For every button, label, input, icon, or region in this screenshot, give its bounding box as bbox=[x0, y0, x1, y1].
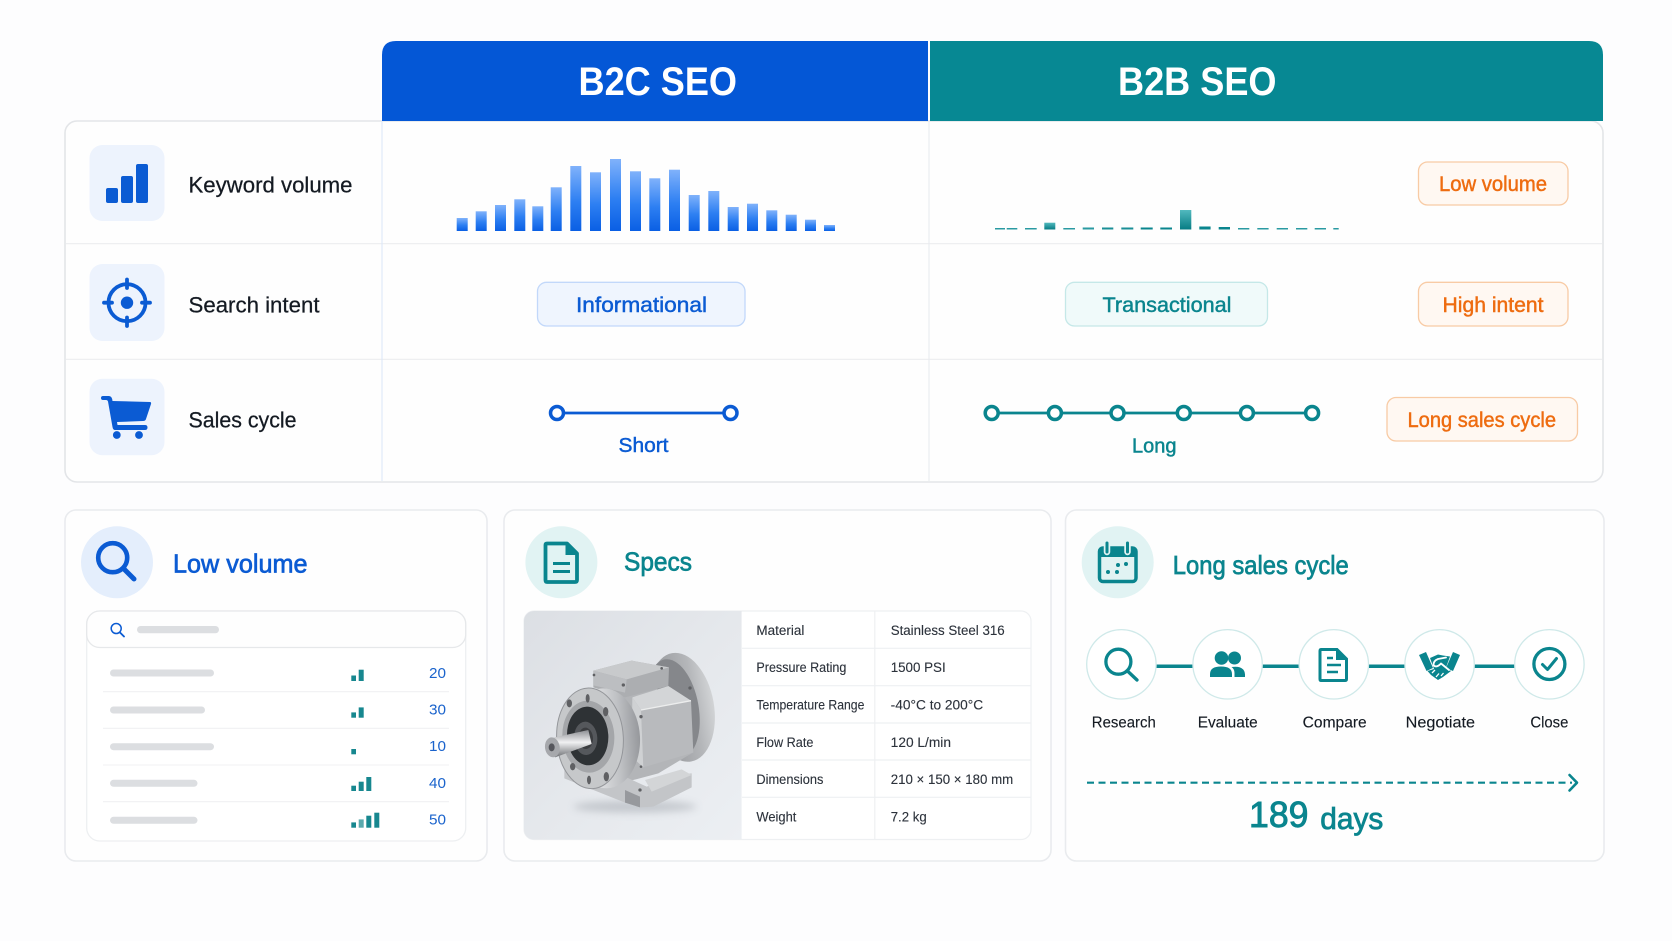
icon: document circle bbox=[525, 526, 597, 598]
metric: 189 days bbox=[1249, 794, 1383, 836]
heading: low volume: Low volume bbox=[173, 549, 308, 579]
pill: High intent bbox=[1418, 282, 1568, 326]
keyword list box: 10 bbox=[429, 738, 446, 755]
row: search intent label bbox=[90, 264, 320, 341]
arrow: dashed timeline bbox=[1087, 775, 1577, 790]
spec table bbox=[524, 611, 1031, 840]
process connector lines bbox=[1156, 665, 1515, 668]
spec table: 210 × 150 × 180 mm bbox=[891, 772, 1013, 787]
heading: long sales cycle: Long sales cycle bbox=[1173, 550, 1349, 580]
pill: Long sales cycle bbox=[1387, 398, 1578, 441]
header: B2C SEO bbox=[382, 41, 928, 121]
pill: Informational: Informational bbox=[576, 294, 707, 317]
keyword list box bbox=[87, 611, 466, 841]
step: compare: Compare bbox=[1303, 714, 1367, 731]
timeline: long: Long bbox=[1132, 436, 1176, 458]
step: evaluate: Evaluate bbox=[1198, 714, 1258, 731]
metric: 189 days: 189 bbox=[1249, 794, 1308, 835]
product photo: gear motor bbox=[524, 611, 742, 840]
timeline: short bbox=[550, 406, 737, 457]
pill: Transactional bbox=[1066, 282, 1268, 326]
keyword list box: 20 bbox=[429, 665, 446, 682]
row: sales cycle label: Sales cycle bbox=[188, 407, 296, 432]
step: research bbox=[1087, 630, 1156, 731]
panel: low volume bbox=[65, 510, 487, 861]
heading: specs: Specs bbox=[624, 547, 692, 577]
spec table: Flow Rate bbox=[756, 735, 813, 750]
panel: long sales cycle bbox=[1066, 510, 1604, 861]
icon: calendar circle bbox=[1082, 526, 1154, 598]
icon: target bbox=[90, 264, 164, 341]
comparison table body bbox=[65, 121, 1603, 482]
pill: High intent: High intent bbox=[1442, 294, 1544, 317]
bar chart: B2C keyword volume bbox=[457, 159, 835, 231]
pill: Low volume: Low volume bbox=[1439, 173, 1547, 196]
header: B2B SEO: B2B SEO bbox=[1118, 60, 1276, 104]
timeline: long bbox=[985, 406, 1319, 458]
spec table: 7.2 kg bbox=[891, 809, 927, 824]
timeline: short: Short bbox=[618, 435, 669, 457]
row: keyword volume label bbox=[90, 145, 352, 221]
keyword list box: 40 bbox=[429, 775, 446, 792]
spec table: -40°C to 200°C bbox=[891, 697, 983, 712]
spec table: 1500 PSI bbox=[891, 660, 946, 675]
step: compare bbox=[1299, 630, 1369, 731]
pill: Low volume bbox=[1418, 162, 1568, 205]
step: evaluate bbox=[1193, 630, 1262, 731]
icon: search circle bbox=[81, 526, 153, 598]
spec table: 120 L/min bbox=[891, 735, 951, 750]
panel: specs bbox=[504, 510, 1051, 861]
header: B2B SEO bbox=[930, 41, 1603, 121]
spec table: Dimensions bbox=[756, 772, 824, 787]
pill: Long sales cycle: Long sales cycle bbox=[1408, 409, 1556, 432]
spec table: Stainless Steel 316 bbox=[891, 623, 1005, 638]
icon: bar chart bbox=[90, 145, 164, 221]
step: close bbox=[1515, 630, 1584, 731]
pill: Transactional: Transactional bbox=[1102, 294, 1232, 317]
keyword list box: 50 bbox=[429, 812, 446, 828]
row: sales cycle label bbox=[90, 379, 296, 455]
bar chart: B2B keyword volume bbox=[995, 210, 1339, 230]
spec table: Pressure Rating bbox=[756, 660, 846, 675]
keyword list box: 30 bbox=[429, 702, 446, 718]
step: close: Close bbox=[1530, 714, 1568, 731]
spec table: Weight bbox=[756, 809, 797, 824]
step: negotiate bbox=[1405, 630, 1475, 731]
row: keyword volume label: Keyword volume bbox=[188, 172, 352, 197]
metric: 189 days: days bbox=[1320, 801, 1383, 836]
pill: Informational bbox=[538, 282, 745, 326]
icon: shopping cart bbox=[90, 379, 164, 455]
spec table: Temperature Range bbox=[756, 697, 864, 712]
step: research: Research bbox=[1092, 714, 1156, 731]
row: search intent label: Search intent bbox=[188, 292, 320, 317]
step: negotiate: Negotiate bbox=[1406, 714, 1475, 731]
header: B2C SEO: B2C SEO bbox=[578, 60, 737, 104]
spec table: Material bbox=[756, 623, 804, 638]
